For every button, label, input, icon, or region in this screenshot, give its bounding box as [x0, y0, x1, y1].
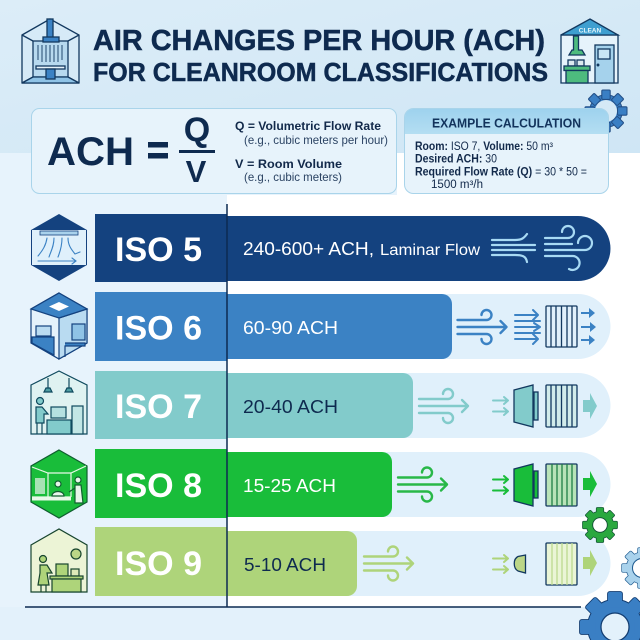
- icon: ISO 6 room: [31, 293, 87, 359]
- icon: filter: [546, 464, 577, 506]
- icon: filter: [546, 385, 577, 427]
- icon: clean facility: CLEAN: [579, 28, 601, 34]
- value ISO 8: 15-25 ACH: [243, 476, 336, 496]
- formula ACH = Q / V: [47, 111, 215, 189]
- icon: outflow arrows: [581, 308, 596, 345]
- example text: Desired ACH: 30: [415, 154, 497, 166]
- icon: fan unit: [514, 464, 538, 506]
- bar ISO 8: [227, 452, 392, 517]
- icon: small arrows: [493, 397, 508, 415]
- example text: Room: ISO 7, Volume: 50 m³: [415, 141, 553, 153]
- icon: clean facility: [561, 19, 618, 83]
- icon: small arrows: [493, 476, 508, 494]
- label ISO 9: [95, 527, 227, 596]
- row: ISO 7: ISO 7: [115, 388, 202, 426]
- icon: outflow arrow: [583, 393, 597, 419]
- icon: ISO 9 room: [31, 529, 87, 592]
- variable definitions: (e.g., cubic meters per hour): [244, 133, 388, 147]
- bar ISO 5: [227, 216, 610, 281]
- icon: outflow arrow: [583, 550, 597, 576]
- icon: ISO 5 laminar room: [31, 214, 87, 281]
- bar ISO 7: [227, 373, 413, 438]
- title: FOR CLEANROOM CLASSIFICATIONS: [93, 59, 548, 87]
- panel: example calculation: [404, 108, 608, 194]
- track ISO 6: [227, 294, 610, 359]
- icon: ISO 8 room: [31, 450, 87, 518]
- row: ISO 6: ISO 6: [115, 310, 202, 348]
- example text: 1500 m³/h: [431, 179, 483, 191]
- track ISO 9: [227, 531, 610, 596]
- axes: [25, 204, 581, 607]
- row: ISO 9: ISO 9: [115, 545, 202, 583]
- icon: ISO 7 room: [31, 371, 87, 434]
- formula ACH = Q / V: Q: [184, 111, 210, 149]
- icon: airflow: [364, 546, 413, 580]
- value ISO 7: 20-40 ACH: [243, 397, 338, 417]
- value ISO 6: 60-90 ACH: [243, 318, 338, 338]
- variable definitions: [235, 119, 388, 184]
- icon: arrows into filter: [515, 310, 540, 344]
- formula ACH = Q / V: V: [186, 154, 207, 189]
- icon: filter: [546, 306, 577, 347]
- variable definitions: V = Room Volume: [235, 157, 342, 171]
- icon: filter: [546, 543, 577, 585]
- label ISO 6: [95, 292, 227, 361]
- row: ISO 5: ISO 5: [115, 231, 202, 269]
- title: AIR CHANGES PER HOUR (ACH): [93, 25, 545, 57]
- label ISO 8: [95, 449, 227, 518]
- bar ISO 9: [227, 531, 357, 596]
- value ISO 9: 5-10 ACH: [244, 555, 326, 575]
- row: ISO 6: [95, 292, 610, 361]
- gear: light blue: [622, 548, 640, 588]
- example heading: EXAMPLE CALCULATION: [432, 116, 581, 130]
- gear: large blue: [580, 592, 640, 640]
- row: ISO 5: [95, 214, 610, 282]
- example text: Required Flow Rate (Q) = 30 * 50 =: [415, 166, 587, 178]
- row: ISO 8: [95, 449, 610, 518]
- gear: green: [583, 508, 617, 542]
- icon: outflow arrow: [583, 471, 597, 497]
- row: ISO 9: [95, 527, 610, 596]
- icon: airflow: [419, 389, 468, 423]
- icon: small fan unit: [514, 555, 526, 573]
- value ISO 5: 240-600+ ACH,: [243, 239, 374, 259]
- example text: [415, 141, 587, 191]
- variable definitions: (e.g., cubic meters): [244, 170, 342, 184]
- row: ISO 8: ISO 8: [115, 467, 202, 505]
- bar ISO 6: [227, 294, 452, 359]
- icon: small arrows: [493, 555, 508, 573]
- label ISO 5: [95, 214, 227, 282]
- icon: laminar airflow: [492, 226, 592, 270]
- icon: airflow: [398, 468, 447, 502]
- formula ACH = Q / V: ACH: [47, 130, 134, 174]
- icon: fan unit: [514, 385, 538, 427]
- title: [93, 25, 548, 87]
- track ISO 7: [227, 373, 610, 438]
- gear: behind example panel: [585, 90, 627, 132]
- icon: cleanroom chamber: [22, 19, 79, 83]
- row: ISO 7: [95, 371, 610, 439]
- row: ISO 5: Laminar Flow: [380, 242, 480, 259]
- label ISO 7: [95, 371, 227, 439]
- icon: airflow: [458, 310, 506, 344]
- track ISO 8: [227, 452, 610, 517]
- variable definitions: Q = Volumetric Flow Rate: [235, 119, 381, 133]
- panel: formula: [32, 108, 396, 194]
